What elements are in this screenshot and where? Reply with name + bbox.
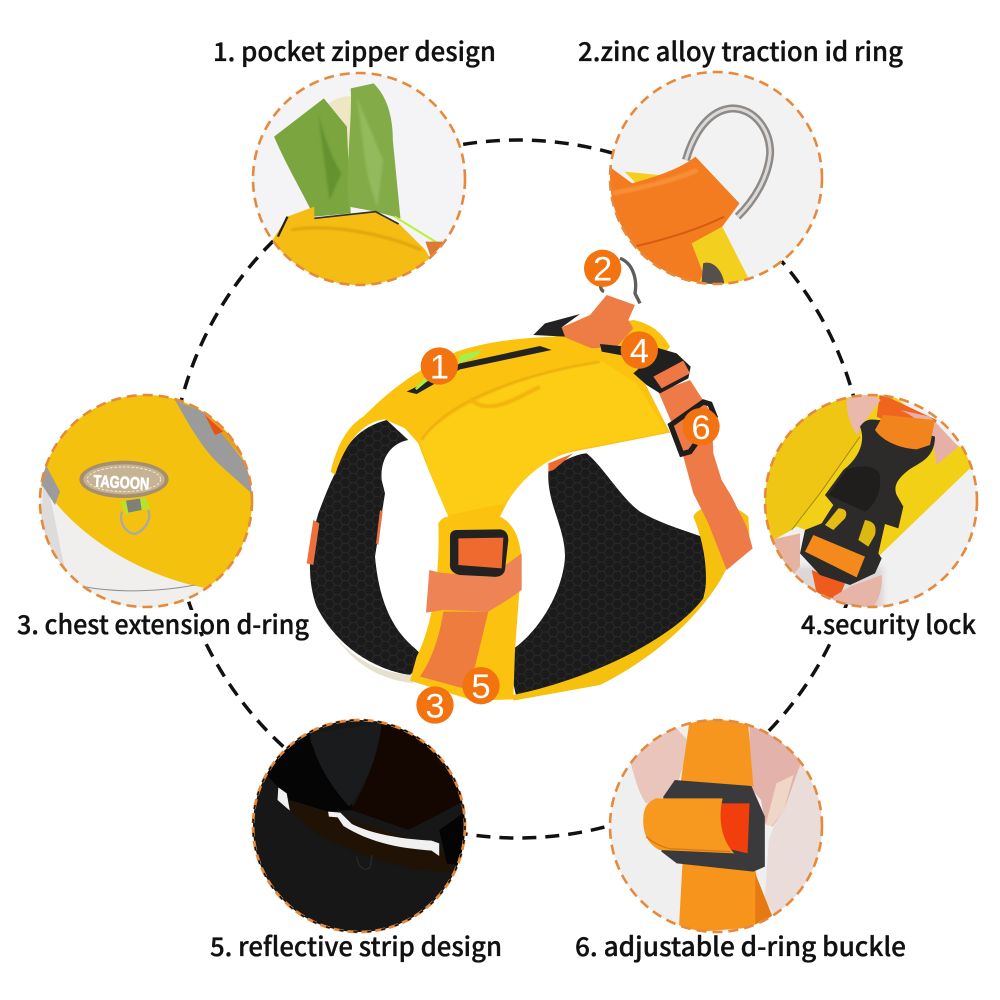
heading 6: 6. adjustable d-ring buckle	[575, 927, 906, 964]
chest buckle	[450, 529, 508, 577]
left inner black padding	[310, 420, 427, 675]
icon: yellow pad	[760, 393, 977, 557]
neon zipper pull	[415, 350, 482, 390]
badge 6	[682, 408, 720, 447]
panel highlight	[420, 360, 667, 515]
icon: left green bag	[274, 98, 351, 217]
icon: logo patch	[79, 461, 169, 498]
bottom reflective and yellow rim	[337, 638, 413, 683]
icon: yellow pocket	[272, 206, 430, 285]
icon: upper strap	[681, 717, 753, 787]
badge 5: 5	[471, 668, 491, 706]
panel: adjustable buckle photo	[610, 717, 826, 933]
icon: right background shadow	[765, 764, 822, 913]
icon: metal D-ring	[686, 108, 770, 217]
icon: red inside	[719, 803, 750, 853]
icon: lower strap	[679, 863, 763, 933]
heading 5: 5. reflective strip design	[210, 927, 502, 964]
harness illustration	[307, 250, 753, 725]
icon: yellow fabric	[625, 172, 751, 290]
shoulder webbing	[562, 295, 635, 348]
icon: white background corner	[40, 486, 204, 607]
heading 3: 3. chest extension d-ring	[17, 605, 309, 642]
heading 4: 4.security lock	[801, 605, 976, 642]
panel: reflective strip photo	[253, 720, 468, 932]
white masks behind labels	[170, 608, 985, 642]
badge 2	[584, 250, 621, 289]
icon: small D-ring	[120, 497, 150, 534]
badge 4	[621, 331, 658, 370]
badge 4: 4	[630, 332, 649, 370]
icon: black slider	[661, 780, 765, 872]
icon: reflective strip	[175, 400, 253, 495]
icon: right finger	[750, 720, 801, 827]
icon: rolled webbing	[643, 798, 734, 853]
icon: buckle opening	[825, 508, 846, 530]
lower orange strap	[420, 612, 488, 688]
icon: fingers	[847, 395, 881, 435]
badge 1: 1	[430, 348, 449, 386]
icon: cream roll behind bags	[328, 96, 351, 152]
slider buckle	[671, 402, 715, 454]
icon: shadow on white	[793, 567, 883, 610]
panel: pocket zipper photo	[253, 73, 465, 293]
icon: dark shapes	[267, 730, 355, 812]
badge 3: 3	[425, 687, 445, 725]
badge 5	[462, 667, 500, 706]
zipper	[407, 346, 552, 394]
connecting dashed ring	[170, 140, 866, 838]
icon: rivet	[702, 262, 724, 284]
right yellow rim	[513, 505, 750, 701]
right black padding	[507, 453, 707, 698]
icon: plastic buckle	[800, 419, 935, 585]
icon: orange roller	[805, 535, 865, 577]
main yellow panel	[331, 320, 670, 701]
badge 1	[421, 347, 458, 386]
top buckle bit	[533, 314, 580, 337]
right strap	[658, 380, 753, 570]
icon: orange webbing	[609, 157, 740, 290]
panel: chest d-ring photo	[33, 395, 257, 620]
metal ring	[600, 258, 640, 303]
panel: security lock photo	[760, 393, 977, 613]
icon: neon cord	[394, 216, 438, 242]
icon: right green bag	[348, 83, 400, 218]
heading 1: 1. pocket zipper design	[213, 32, 496, 69]
pocket fold	[422, 362, 600, 440]
heading 2: 2.zinc alloy traction id ring	[578, 32, 903, 69]
logo text: TAGOON	[93, 472, 150, 493]
left orange tab	[307, 520, 319, 565]
strap under panel	[548, 453, 573, 472]
icon: lower strap	[812, 570, 845, 600]
badge 2: 2	[593, 251, 612, 289]
chest webbing wrap	[426, 553, 522, 613]
badge 3	[416, 686, 454, 725]
icon: left finger	[631, 728, 690, 803]
panel: D-ring photo	[609, 72, 822, 290]
side-release buckle	[600, 344, 691, 393]
reflective white strip	[278, 787, 439, 856]
badge 6: 6	[691, 409, 711, 447]
icon: brown band	[286, 800, 455, 872]
